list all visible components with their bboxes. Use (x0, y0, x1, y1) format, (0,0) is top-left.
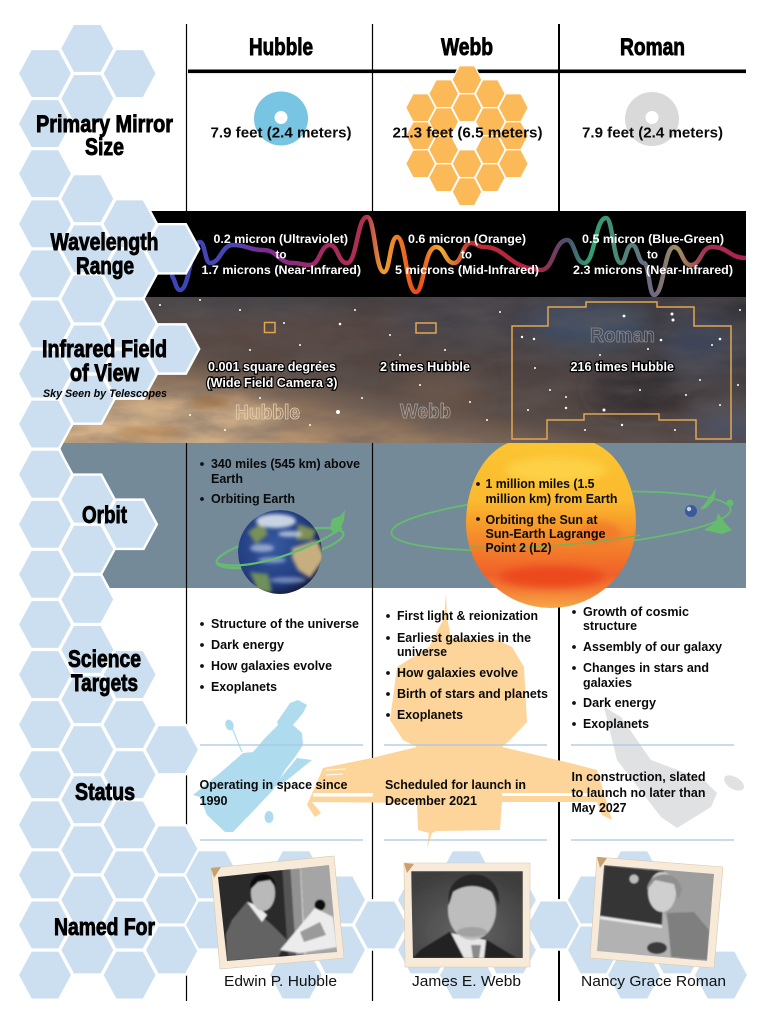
icon: Hubble mirror (254, 92, 308, 146)
status row rules (200, 745, 734, 840)
science targets: Webb: Birth of stars and planets (397, 687, 548, 701)
wavelength values: 2.3 microns (Near-Infrared) (573, 263, 733, 277)
heading: orbit: Orbit (82, 502, 127, 529)
science targets: Roman: Assembly of our galaxy (583, 640, 722, 654)
wavelength values (202, 232, 733, 277)
heading: infrared field of view: Sky Seen by Telescopes (43, 388, 167, 400)
status text: In construction, slated (572, 770, 706, 784)
telescope ghost labels: Webb (400, 401, 451, 423)
column headers (249, 34, 685, 61)
wavelength values: to (461, 248, 472, 262)
science targets: Roman: Growth of cosmic (583, 605, 689, 619)
science targets text (200, 605, 722, 731)
science targets: Webb (386, 609, 548, 722)
heading: primary mirror size: Size (85, 134, 124, 161)
Webb orbit path front (470, 535, 640, 548)
orbit text: Hubble (200, 457, 360, 506)
icon: Hubble telescope in orbit (330, 510, 345, 533)
status text: December 2021 (385, 794, 477, 808)
icon: Webb silhouette (307, 593, 612, 848)
icon: Webb segmented mirror (406, 65, 528, 205)
heading: wavelength range: Wavelength (50, 229, 158, 256)
chart: wavelength wave (170, 217, 746, 295)
science targets: Roman: Changes in stars and (583, 661, 709, 675)
person names: James E. Webb (412, 973, 521, 990)
divider lines on orbit panel (186, 443, 372, 588)
science targets: Hubble: How galaxies evolve (211, 659, 332, 673)
heading: wavelength range: Range (76, 253, 134, 280)
mirror size values: 7.9 feet (2.4 meters) (582, 124, 723, 142)
field of view values: 216 times Hubble (570, 360, 674, 374)
science targets: Webb: First light & reionization (397, 609, 538, 623)
science targets: Roman (572, 605, 722, 731)
field of view outlines (264, 302, 731, 439)
wavelength values: 5 microns (Mid-Infrared) (395, 263, 539, 277)
panel: wavelength range (140, 211, 746, 297)
photo: Edwin P. Hubble (211, 856, 344, 969)
heading: primary mirror size: Primary Mirror (36, 111, 173, 138)
heading: infrared field of view (42, 336, 167, 400)
science targets: Roman: galaxies (583, 676, 632, 690)
icon: Earth (238, 510, 325, 594)
Hubble orbit path back (214, 520, 346, 576)
orbit text: Webb (476, 477, 618, 555)
wavelength values: 1.7 microns (Near-Infrared) (202, 263, 361, 277)
mirror size values (210, 124, 723, 142)
sky image (64, 297, 746, 443)
wavelength values: to (276, 248, 286, 262)
heading: science targets: Science (68, 646, 141, 673)
status text: Operating in space since (200, 778, 348, 792)
orbit text: Hubble: 340 miles (545 km) above (211, 457, 360, 471)
photo: James E. Webb (404, 863, 530, 967)
panel: infrared field of view (64, 297, 746, 443)
wavelength values: 0.5 micron (Blue-Green) (582, 232, 724, 246)
orbit text: Webb: 1 million miles (1.5 (486, 477, 595, 491)
heading: wavelength range (50, 229, 158, 280)
mirror size values: 21.3 feet (6.5 meters) (392, 124, 542, 142)
heading: primary mirror size (36, 111, 173, 161)
photo: Nancy Grace Roman (590, 857, 723, 968)
field of view values: 2 times Hubble (380, 360, 470, 374)
column headers: Webb (441, 34, 493, 61)
column headers: Roman (620, 34, 685, 61)
panel: primary mirror size (210, 65, 723, 205)
row headings (36, 111, 173, 941)
wavelength values: to (647, 248, 658, 262)
orbit text: Hubble: Orbiting Earth (211, 492, 295, 506)
wavelength values: 0.2 micron (Ultraviolet) (214, 232, 348, 246)
orbit text: Webb: Sun-Earth Lagrange (486, 527, 606, 541)
telescope ghost labels (235, 325, 655, 424)
header rule (188, 70, 746, 73)
icon: Roman mirror (625, 92, 679, 146)
telescope ghost labels: Roman (590, 325, 655, 347)
status text (200, 770, 706, 815)
icon: Roman silhouette (604, 707, 747, 828)
status text: 1990 (200, 794, 228, 808)
icon: Webb in orbit (700, 488, 734, 534)
field of view values: 0.001 square degrees (208, 360, 336, 374)
science targets: Webb: universe (397, 645, 447, 659)
heading: infrared field of view: of View (70, 360, 139, 387)
status text: Scheduled for launch in (385, 778, 526, 792)
heading: infrared field of view: Infrared Field (42, 336, 167, 363)
orbit text: Hubble: Earth (211, 472, 243, 486)
science targets: Webb: Earliest galaxies in the (397, 631, 531, 645)
Hubble orbit path front (217, 528, 342, 566)
heading: status: Status (75, 779, 135, 806)
field of view values (206, 360, 674, 390)
orbit text: Webb: Point 2 (L2) (486, 541, 552, 555)
field of view values: (Wide Field Camera 3) (206, 376, 338, 390)
science targets: Webb: Exoplanets (397, 708, 463, 722)
science targets: Roman: Dark energy (583, 696, 656, 710)
panel: orbit (58, 443, 746, 608)
science targets: Hubble (200, 617, 359, 694)
icon: Earth small (685, 505, 697, 517)
person names (224, 973, 726, 990)
person names: Edwin P. Hubble (224, 973, 337, 990)
column headers: Hubble (249, 34, 313, 61)
science targets: Hubble: Structure of the universe (211, 617, 359, 631)
status text: May 2027 (572, 801, 627, 815)
heading: named for: Named For (54, 914, 155, 941)
heading: science targets (68, 646, 141, 697)
orbit text: Webb: Orbiting the Sun at (486, 513, 598, 527)
icon: Hubble silhouette (193, 700, 312, 832)
science targets: Hubble: Exoplanets (211, 680, 277, 694)
science targets: Hubble: Dark energy (211, 638, 284, 652)
column divider lines (186, 24, 559, 1001)
orbit text: Webb: million km) from Earth (486, 492, 618, 506)
science targets: Webb: How galaxies evolve (397, 666, 518, 680)
person names: Nancy Grace Roman (581, 973, 726, 990)
science targets: Roman: structure (583, 619, 637, 633)
icon: Sun (466, 443, 636, 608)
science targets: Roman: Exoplanets (583, 717, 649, 731)
telescope ghost labels: Hubble (235, 402, 300, 424)
heading: science targets: Targets (71, 670, 138, 697)
mirror size values: 7.9 feet (2.4 meters) (210, 124, 352, 142)
Webb orbit path back (390, 482, 732, 560)
wavelength values: 0.6 micron (Orange) (408, 232, 526, 246)
status text: to launch no later than (572, 786, 706, 800)
